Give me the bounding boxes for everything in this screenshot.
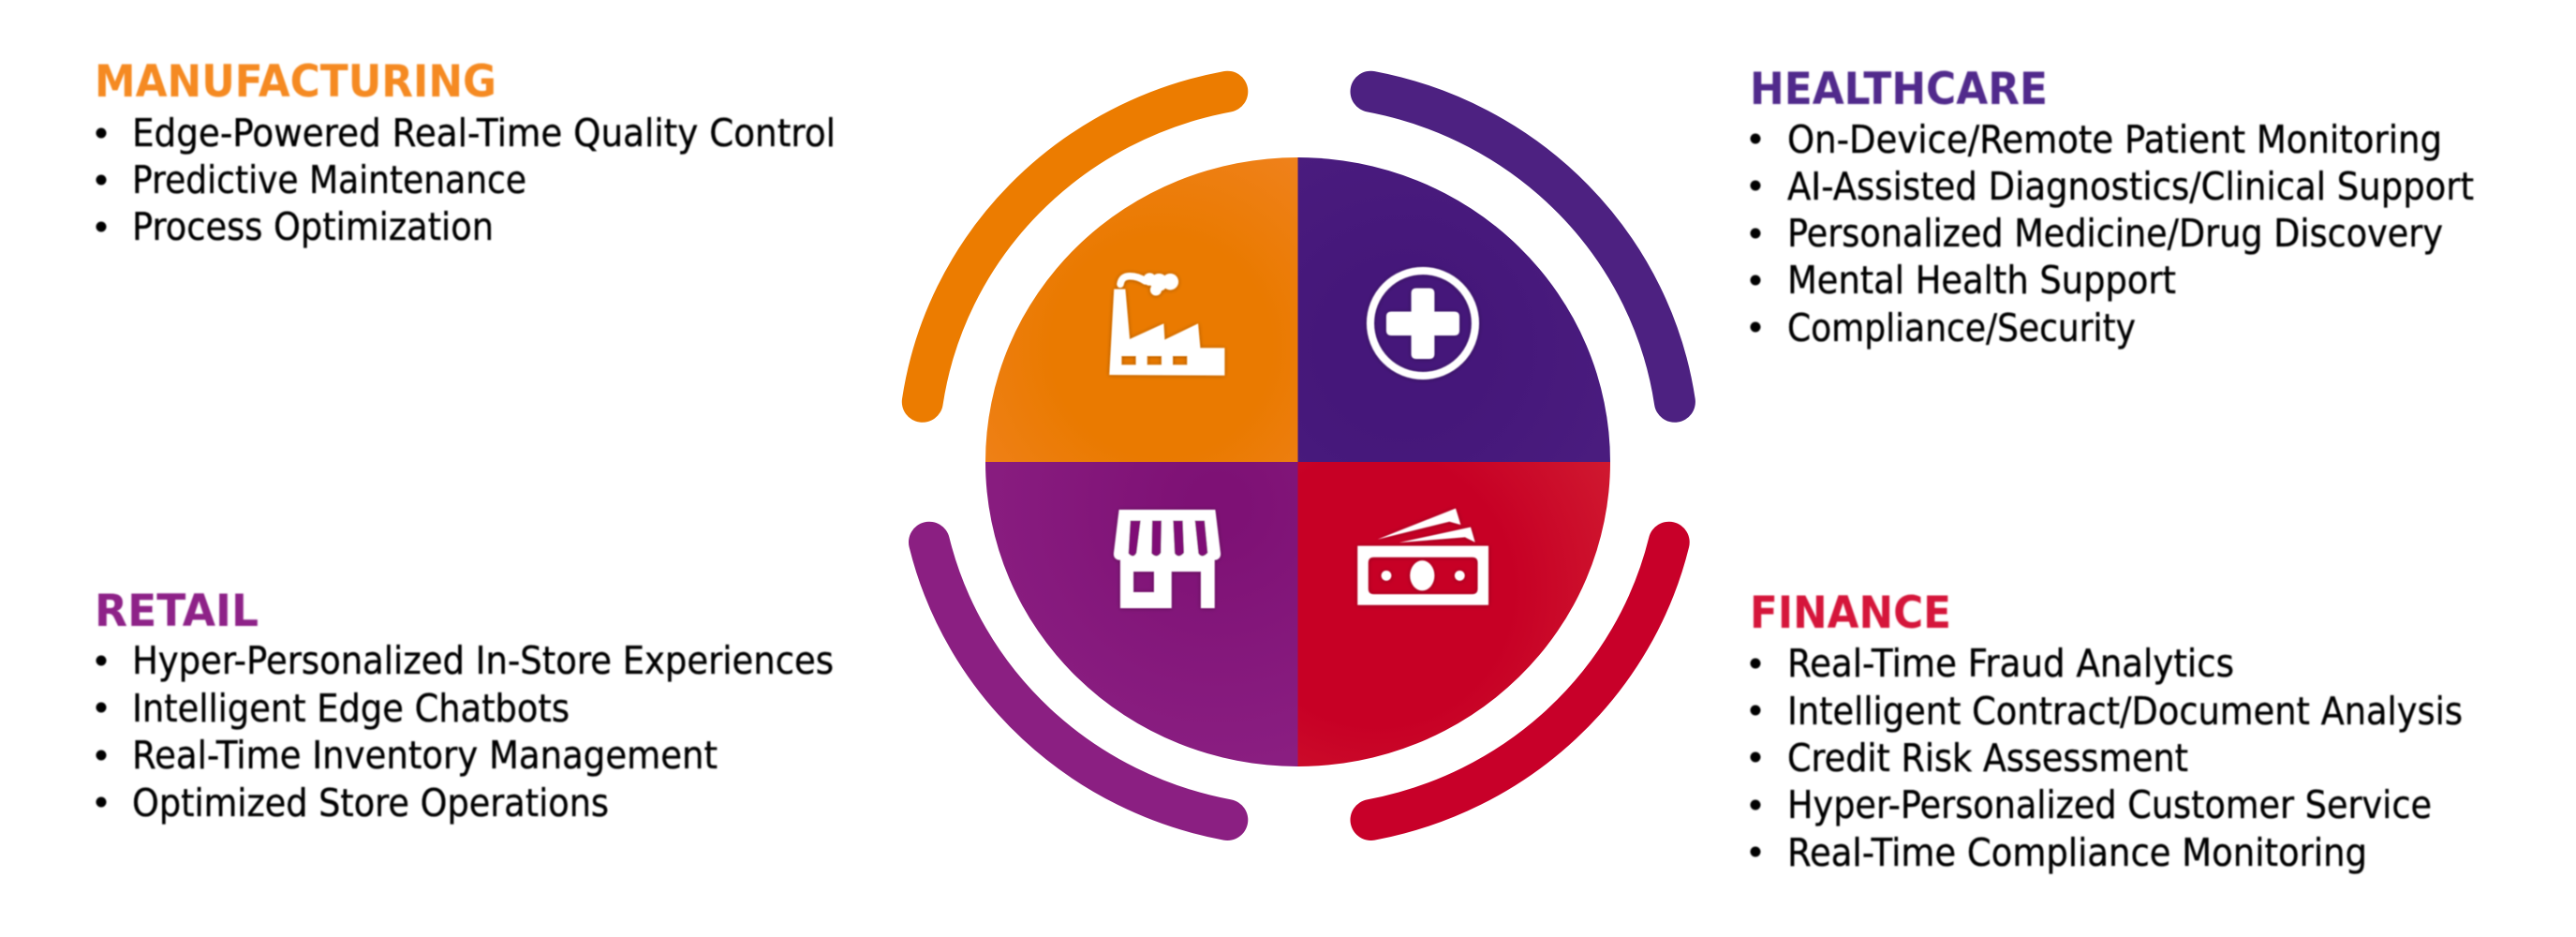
list: retail: Real-Time Inventory Management [132,733,718,778]
list: finance: Real-Time Fraud Analytics [1787,641,2234,686]
quadrant: finance [1298,462,1610,766]
list: manufacturing: Process Optimization [132,204,494,249]
list: retail: Optimized Store Operations [132,781,609,825]
panel: retail [95,586,834,825]
arc: healthcare ring [1371,92,1675,402]
arc: manufacturing ring [923,92,1227,402]
list: retail: Intelligent Edge Chatbots [132,686,570,731]
list: healthcare: Mental Health Support [1787,258,2176,303]
quadrant: retail [985,462,1298,766]
list: manufacturing: Edge-Powered Real-Time Quality Control [132,111,836,156]
list: manufacturing: Predictive Maintenance [132,157,526,202]
quadrant: healthcare [1298,157,1610,462]
icon: medical cross [1370,271,1475,376]
panel: healthcare [1750,64,2474,350]
list: finance: Credit Risk Assessment [1787,736,2188,781]
list: finance: Intelligent Contract/Document Analysis [1787,689,2463,734]
list: finance: Real-Time Compliance Monitoring [1787,830,2367,875]
icon: factory [1109,273,1224,376]
list: healthcare [1750,117,2474,350]
list: manufacturing [96,111,836,249]
arc: finance ring [1371,543,1669,820]
panel: finance [1750,587,2463,875]
icon: money [1357,509,1488,605]
list: finance: Hyper-Personalized Customer Service [1787,782,2432,827]
panel: manufacturing [95,56,836,249]
arc: retail ring [929,543,1227,820]
heading: healthcare: HEALTHCARE [1750,64,2048,115]
list: finance [1750,641,2463,875]
icon: store [1114,510,1221,608]
heading: finance: FINANCE [1750,587,1951,639]
list: retail [96,638,834,825]
list: healthcare: Compliance/Security [1787,305,2136,350]
list: healthcare: AI-Assisted Diagnostics/Clinical Support [1787,164,2474,209]
heading: retail: RETAIL [95,586,259,637]
quadrant: manufacturing [985,157,1298,462]
list: retail: Hyper-Personalized In-Store Experiences [132,638,834,683]
list: healthcare: On-Device/Remote Patient Monitoring [1787,117,2442,162]
list: healthcare: Personalized Medicine/Drug Discovery [1787,211,2443,256]
heading: manufacturing: MANUFACTURING [95,56,496,108]
